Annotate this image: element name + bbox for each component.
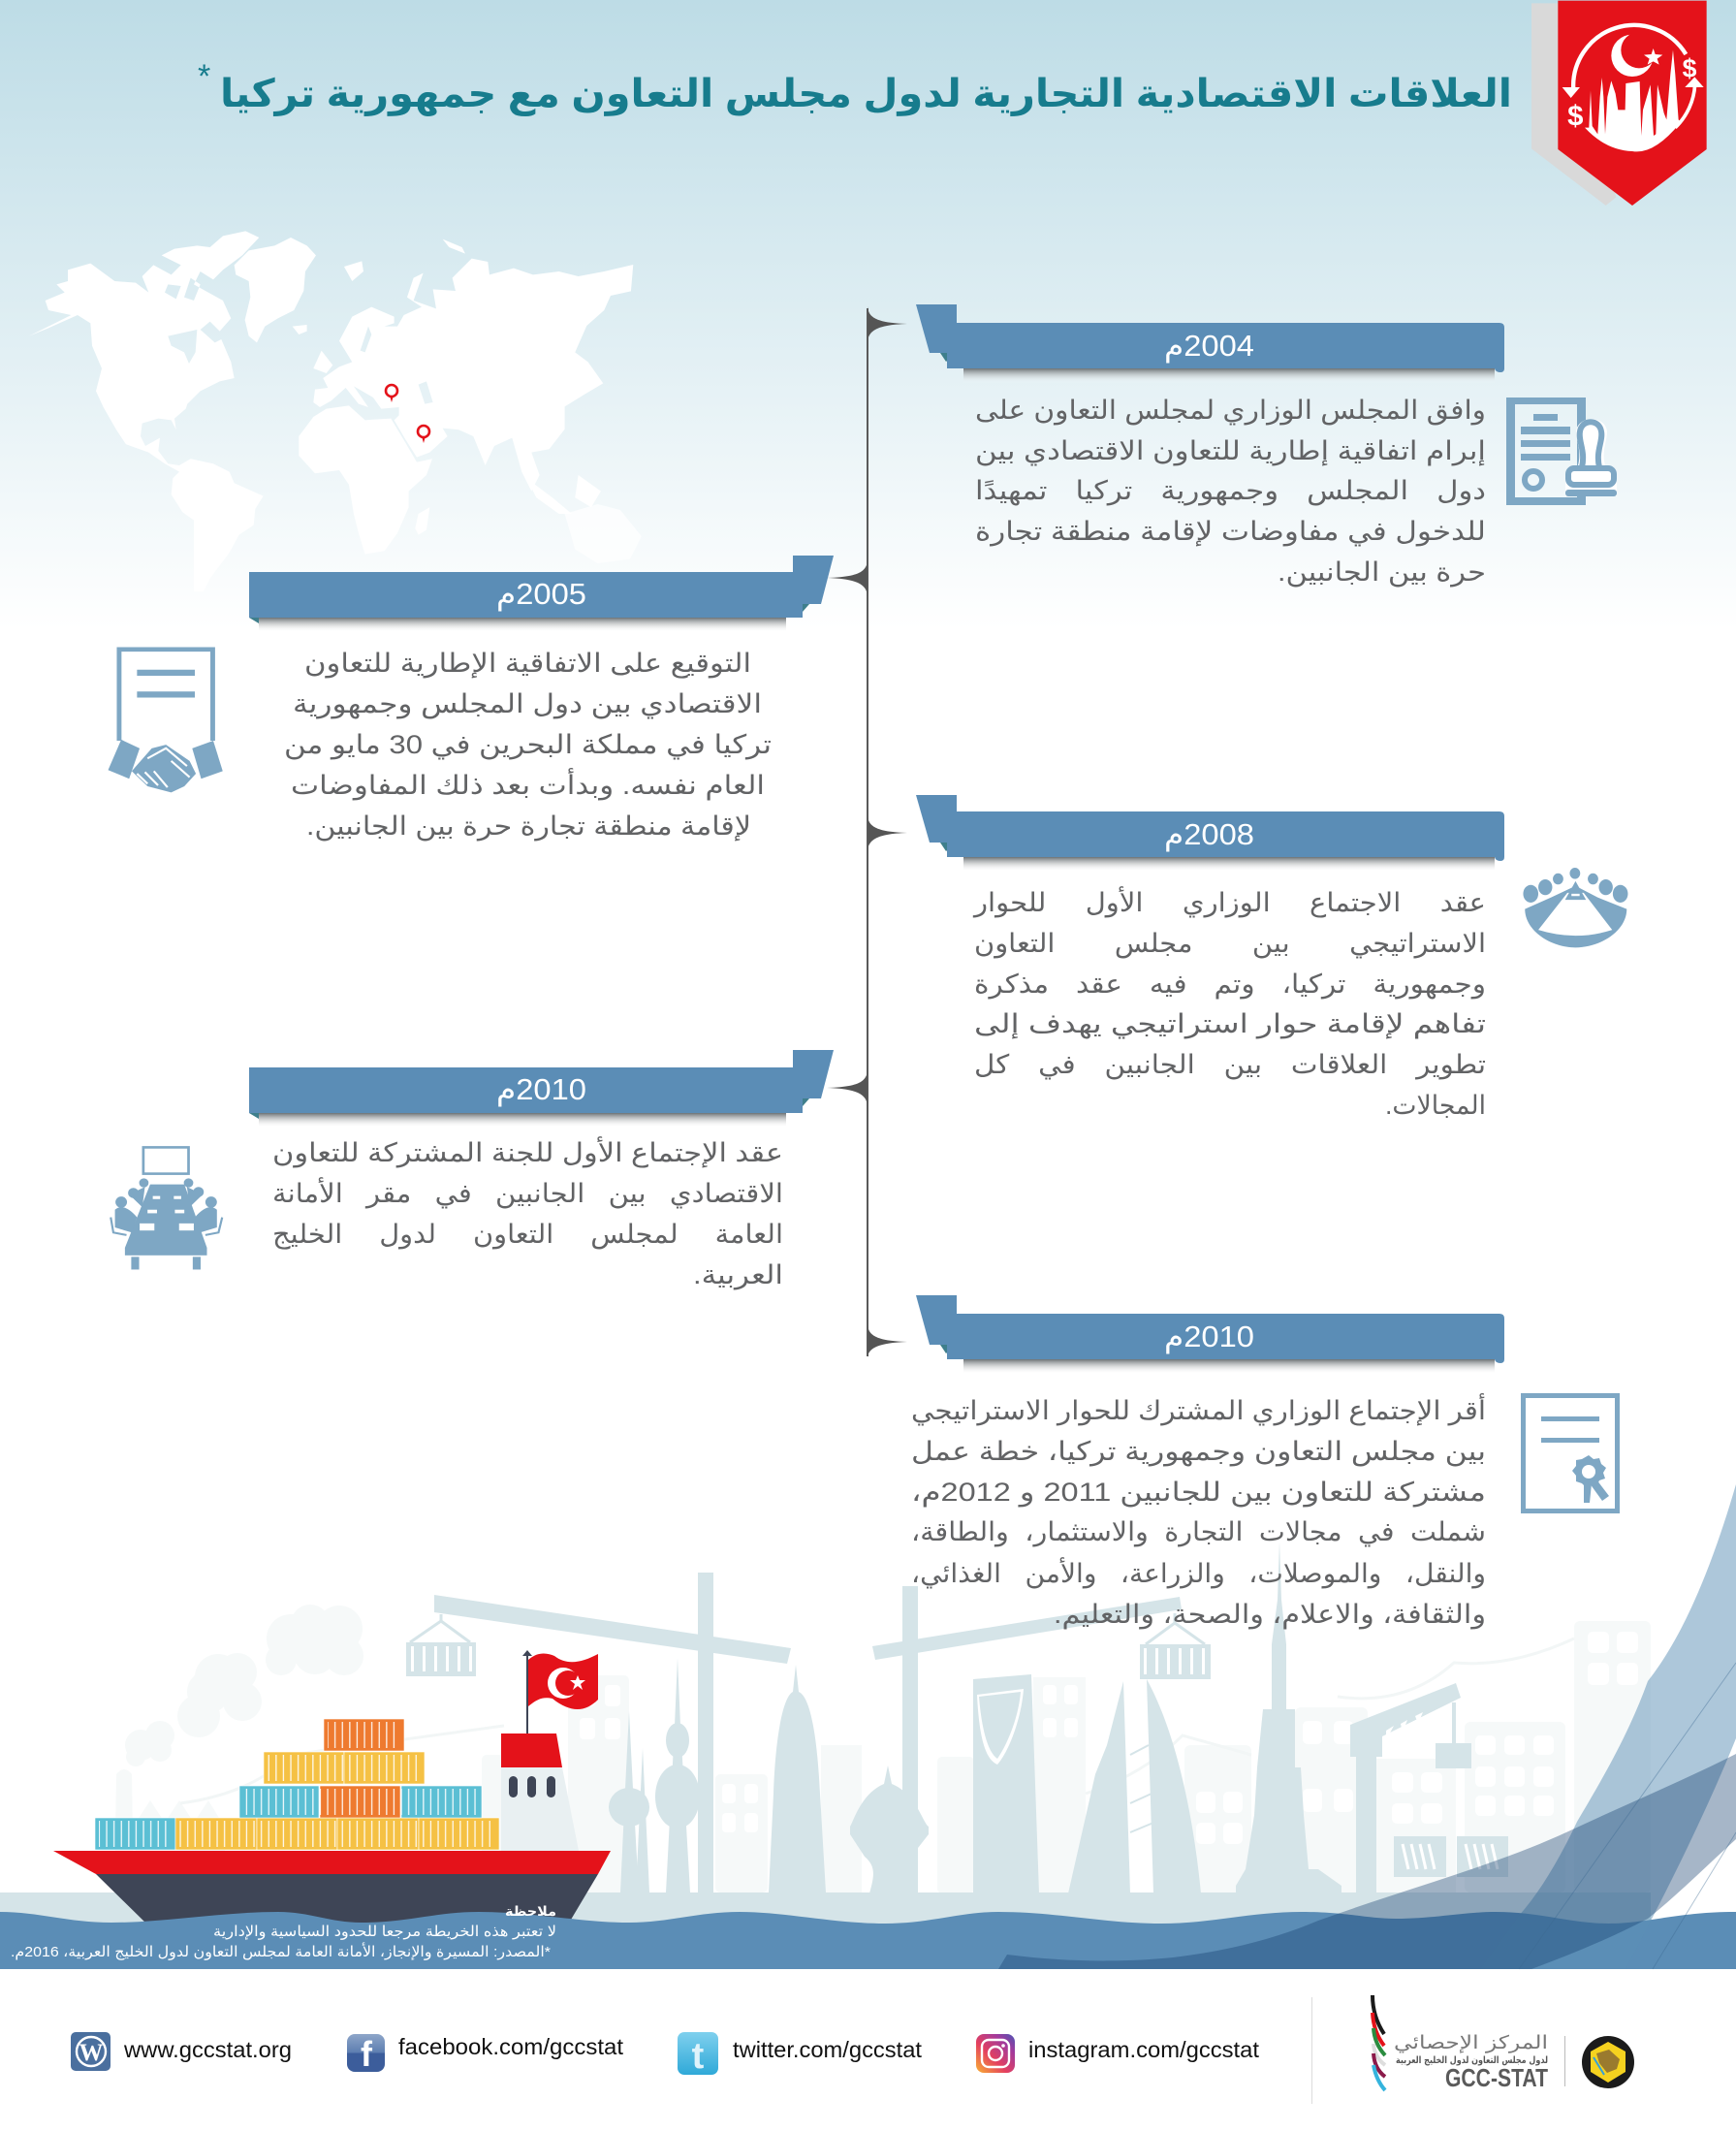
logo ribbons bbox=[1373, 1995, 1385, 2090]
text 2008: تطوير العلاقات بين الجانبين في كل bbox=[974, 1050, 1486, 1080]
text 2004 bbox=[975, 396, 1486, 588]
pale background city bbox=[114, 1605, 1651, 1894]
icon: roundtable bbox=[1523, 868, 1627, 947]
cargo ship bbox=[53, 1650, 611, 1924]
skyline silhouettes bbox=[0, 1542, 1651, 1936]
GCC-STAT logo: لدول مجلس التعاون لدول الخليج العربية bbox=[1396, 2055, 1548, 2066]
note text bbox=[11, 1903, 556, 1960]
banner 2004: 2004م bbox=[1164, 329, 1254, 363]
sea waves bbox=[0, 1912, 1736, 1969]
text 2005 bbox=[284, 649, 772, 842]
title: العلاقات الاقتصادية التجارية لدول مجلس التعاون مع جمهورية تركيا bbox=[220, 73, 1512, 116]
Kingdom tower bbox=[973, 1674, 1039, 1893]
GCC-STAT logo: GCC-STAT bbox=[1445, 2063, 1548, 2092]
GCC emblem bbox=[1582, 2036, 1634, 2088]
banner 2005: 2005م bbox=[496, 577, 586, 611]
text 2005: الاقتصادي بين دول المجلس وجمهورية bbox=[293, 689, 762, 719]
text 2005: تركيا في مملكة البحرين في 30 مايو من bbox=[284, 730, 772, 760]
text 2005: العام نفسه. وبدأت بعد ذلك المفاوضات bbox=[291, 767, 765, 801]
connector 2010 left bbox=[827, 1070, 868, 1106]
text 2010 right: والثقافة، والاعلام، والصحة، والتعليم. bbox=[1054, 1600, 1486, 1630]
Kuwait towers bbox=[609, 1658, 700, 1892]
footer: website bbox=[71, 2032, 292, 2071]
connector 2008 bbox=[868, 815, 907, 851]
footer: website: www.gccstat.org bbox=[123, 2037, 292, 2062]
icon: twitter bbox=[678, 2032, 718, 2077]
text 2010 right: أقر الإجتماع الوزاري المشترك للحوار الاستراتيجي bbox=[911, 1392, 1486, 1426]
hull bbox=[53, 1851, 611, 1924]
text 2004: للدخول في مفاوضات لإقامة منطقة تجارة bbox=[975, 517, 1486, 547]
background gradient bbox=[0, 0, 1736, 630]
text 2010 left: عقد الإجتماع الأول للجنة المشتركة للتعاون bbox=[272, 1135, 783, 1168]
text 2008 bbox=[972, 885, 1486, 1120]
footer: twitter: twitter.com/gccstat bbox=[733, 2037, 923, 2062]
text 2010 left bbox=[272, 1135, 783, 1290]
text 2004: حرة بين الجانبين. bbox=[1278, 557, 1486, 588]
text 2010 right: شملت في مجالات التجارة والاستثمار، والطاقة، bbox=[911, 1517, 1486, 1547]
Burj tower bbox=[1236, 1542, 1341, 1893]
text 2004: وافق المجلس الوزاري لمجلس التعاون على bbox=[975, 396, 1486, 426]
text 2008: عقد الاجتماع الوزاري الأول للحوار bbox=[972, 885, 1486, 918]
icon: facebook bbox=[347, 2034, 385, 2074]
icon: document and stamp bbox=[1506, 398, 1617, 505]
text 2005: التوقيع على الاتفاقية الإطارية للتعاون bbox=[304, 649, 751, 679]
GCC-STAT logo bbox=[1373, 1995, 1634, 2092]
text 2010 left: العربية. bbox=[693, 1260, 783, 1290]
icon: instagram bbox=[976, 2034, 1015, 2073]
text 2008: تفاهم لإقامة حوار استراتيجي يهدف إلى bbox=[974, 1009, 1486, 1039]
icon: meeting table bbox=[110, 1147, 222, 1269]
text 2010 right bbox=[911, 1392, 1486, 1630]
text 2010 right: بين مجلس التعاون وجمهورية تركيا، خطة عمل bbox=[911, 1437, 1486, 1467]
footer: instagram: instagram.com/gccstat bbox=[1028, 2037, 1260, 2062]
badge logo: $ bbox=[1567, 100, 1583, 132]
banner 2010 right bbox=[916, 1295, 1504, 1374]
port containers bbox=[1394, 1836, 1508, 1877]
icon: wordpress: W bbox=[79, 2040, 103, 2066]
cabin bbox=[501, 1733, 579, 1851]
banner 2010 left bbox=[249, 1050, 834, 1128]
note text: ملاحظة bbox=[505, 1903, 556, 1919]
text 2010 right: والنقل، والموصلات، والزراعة، والأمن الغذائي، bbox=[911, 1556, 1486, 1589]
footer separator bbox=[1311, 1997, 1312, 2104]
banner 2010 left: 2010م bbox=[496, 1072, 586, 1106]
map pin: Turkey bbox=[386, 385, 397, 402]
icon: certificate bbox=[1524, 1396, 1617, 1511]
tower bbox=[769, 1665, 826, 1892]
connector 2004 bbox=[868, 306, 907, 342]
footer: instagram bbox=[976, 2034, 1260, 2073]
dome monument bbox=[850, 1765, 929, 1893]
banner 2005 bbox=[249, 556, 834, 632]
badge logo: $ bbox=[1683, 53, 1697, 82]
connector 2010 right bbox=[868, 1324, 907, 1357]
footer: facebook: facebook.com/gccstat bbox=[398, 2034, 624, 2059]
second crane bbox=[872, 1586, 1211, 1893]
world map bbox=[29, 231, 642, 591]
note text: *المصدر: المسيرة والإنجاز، الأمانة العامة لمجلس التعاون لدول الخليج العربية، 2016م. bbox=[11, 1942, 551, 1960]
text 2008: وجمهورية تركيا، وتم فيه عقد مذكرة bbox=[974, 970, 1486, 1000]
banner 2008 bbox=[916, 795, 1504, 872]
Bahrain towers bbox=[1068, 1679, 1201, 1893]
icon: agreement handshake bbox=[109, 650, 223, 792]
text 2004: دول المجلس وجمهورية تركيا تمهيدًا bbox=[975, 476, 1486, 506]
Turkish flag bbox=[522, 1650, 598, 1733]
connector 2005 bbox=[827, 560, 868, 596]
text 2010 right: مشتركة للتعاون بين للجانبين 2011 و 2012م، bbox=[911, 1478, 1486, 1508]
note text: لا تعتبر هذه الخريطة مرجعا للحدود السياسية والإدارية bbox=[213, 1924, 556, 1940]
title asterisk: * bbox=[198, 58, 210, 95]
blue corner sails bbox=[998, 1484, 1736, 1969]
map pin: Gulf bbox=[418, 426, 429, 443]
text 2008: المجالات. bbox=[1385, 1091, 1486, 1120]
text 2010 left: الاقتصادي بين الجانبين في مقر الأمانة bbox=[272, 1176, 783, 1209]
GCC-STAT logo: المركز الإحصائي bbox=[1394, 2032, 1548, 2053]
text 2004: إبرام اتفاقية إطارية للتعاون الاقتصادي بين bbox=[975, 436, 1486, 466]
crane with hanging container bbox=[406, 1573, 791, 1892]
footer: twitter bbox=[678, 2032, 923, 2077]
icon: twitter: t bbox=[692, 2036, 705, 2077]
icon: facebook: f bbox=[361, 2034, 373, 2074]
containers bbox=[95, 1719, 499, 1850]
port crane bbox=[1350, 1683, 1471, 1893]
footer: facebook bbox=[347, 2034, 624, 2074]
banner 2004 bbox=[916, 304, 1504, 383]
badge logo bbox=[1531, 1, 1707, 206]
text 2008: الاستراتيجي بين مجلس التعاون bbox=[974, 929, 1486, 959]
banner 2010 right: 2010م bbox=[1164, 1320, 1254, 1353]
icon: wordpress bbox=[71, 2032, 110, 2071]
text 2005: لإقامة منطقة تجارة حرة بين الجانبين. bbox=[306, 811, 751, 842]
text 2010 left: العامة لمجلس التعاون لدول الخليج bbox=[272, 1220, 783, 1250]
timeline spine bbox=[867, 308, 868, 1356]
banner 2008: 2008م bbox=[1164, 817, 1254, 851]
ground band bbox=[0, 1892, 1651, 1936]
